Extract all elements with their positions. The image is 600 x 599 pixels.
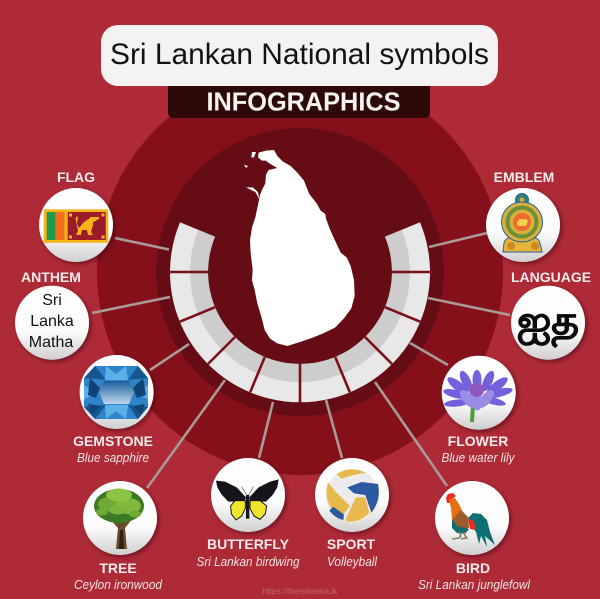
item: emblem [486, 169, 560, 262]
subtitle: blue water lily: Blue water lily [442, 451, 515, 465]
inner dark circle [156, 128, 444, 416]
item: language [511, 269, 591, 360]
item: sport [315, 458, 389, 569]
label: language: LANGUAGE [511, 269, 591, 285]
label: anthem: ANTHEM [21, 269, 81, 285]
label: butterfly: BUTTERFLY [207, 536, 290, 552]
item: anthem [15, 269, 89, 360]
icon: anthem text disc: Matha [29, 334, 73, 351]
watermark: https://thesrilanka.lk [262, 586, 338, 596]
icon: anthem text disc [15, 286, 89, 360]
icon: flag [39, 188, 113, 262]
icon: national emblem [486, 188, 560, 262]
icon: birdwing butterfly [211, 458, 285, 532]
connector lines [92, 233, 510, 488]
map of Sri Lanka [244, 150, 355, 346]
subtitle: volleyball: Volleyball [327, 555, 378, 569]
item: bird [418, 481, 531, 592]
icon: junglefowl [435, 481, 509, 555]
outer red circle [97, 69, 503, 475]
label: tree: TREE [99, 560, 137, 576]
item: tree [74, 481, 163, 592]
icon: anthem text disc: Lanka [30, 313, 74, 330]
infographics bar: INFOGRAPHICS [206, 88, 400, 116]
label: emblem: EMBLEM [494, 169, 554, 185]
icon: anthem text disc: Sri [42, 292, 62, 309]
icon: volleyball [315, 458, 389, 532]
subtitle: blue sapphire: Blue sapphire [77, 451, 149, 465]
subtitle: sri lankan junglefowl: Sri Lankan junglefowl [418, 578, 531, 592]
subtitle: ceylon ironwood: Ceylon ironwood [74, 578, 163, 592]
label: gemstone: GEMSTONE [73, 433, 153, 449]
item: flower [442, 356, 516, 465]
icon: tamil letters: ஐத [517, 299, 579, 348]
label: flag: FLAG [57, 169, 95, 185]
infographics bar [168, 80, 430, 118]
segmented ring [169, 222, 431, 403]
item: gemstone [73, 355, 154, 465]
label: flower: FLOWER [448, 433, 508, 449]
icon: ironwood tree [83, 481, 157, 555]
item: butterfly [196, 458, 300, 569]
label: sport: SPORT [327, 536, 376, 552]
item: flag [39, 169, 113, 262]
title pill [101, 25, 498, 118]
title pill: Sri Lankan National symbols [110, 38, 489, 71]
subtitle: sri lankan birdwing: Sri Lankan birdwing [196, 555, 300, 569]
label: bird: BIRD [456, 560, 490, 576]
icon: blue sapphire [80, 355, 154, 429]
icon: blue water lily [442, 356, 516, 430]
